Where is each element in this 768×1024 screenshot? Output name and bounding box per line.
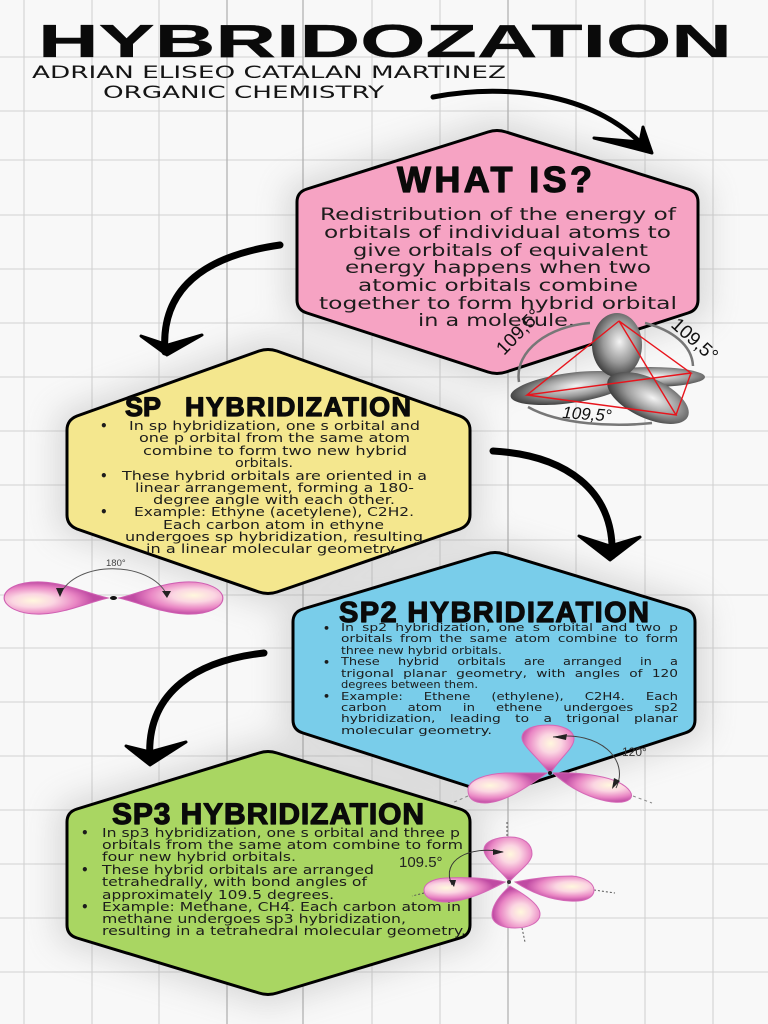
text: sp2 bullets: orbitals from the same atom combine to form: [341, 632, 678, 645]
heading: sp: HYBRIDIZATION: [185, 392, 411, 422]
arrow: to what is: [433, 91, 652, 153]
heading: sp3: SP3 HYBRIDIZATION: [112, 798, 424, 831]
text: sp3 bullets: •: [81, 900, 89, 914]
text: sp bullets: Each carbon atom in ethyne: [163, 518, 384, 532]
subject: ORGANIC CHEMISTRY: [103, 83, 385, 103]
text: sp bullets: linear arrangement, forming a 180-: [135, 481, 414, 495]
icon: trigonal sp2 orbitals: 120°: [622, 745, 647, 759]
text: sp3 bullets: approximately 109.5 degrees.: [102, 888, 334, 902]
text: sp3 bullets: methane undergoes sp3 hybridization,: [102, 912, 406, 926]
arrow: to sp3: [126, 653, 264, 765]
icon: tetrahedral orbital diagram: 109,5°: [562, 403, 612, 425]
icon: tetrahedral orbital diagram: [492, 305, 722, 435]
text: sp2 bullets: These hybrid orbitals are arranged in a: [340, 655, 678, 668]
text: sp3 bullets: orbitals from the same atom combine to form: [102, 838, 463, 852]
text: sp bullets: combine to form two new hybrid: [143, 444, 407, 458]
text: sp bullets: degree angle with each other.: [153, 493, 395, 507]
text: sp2 bullets: carbon atom in ethene undergoes sp2: [341, 701, 678, 714]
text: sp bullets: These hybrid orbitals are oriented in a: [121, 469, 427, 483]
text: sp bullets: in a linear molecular geometry.: [146, 542, 398, 556]
icon: linear sp orbitals: 180°: [106, 558, 126, 569]
text: sp bullets: [100, 419, 427, 556]
text: sp2 bullets: •: [323, 656, 330, 669]
text: sp2 bullets: •: [323, 690, 330, 703]
text: sp2 bullets: three new hybrid orbitals.: [341, 644, 502, 657]
icon: trigonal sp2 orbitals: [452, 725, 652, 803]
text: sp bullets: Example: Ethyne (acetylene), C2H2.: [134, 505, 414, 519]
text: sp3 bullets: resulting in a tetrahedral molecular geometry.: [102, 924, 466, 938]
text: sp2 bullets: hybridization, leading to a trigonal planar: [341, 712, 679, 725]
panel: what is: [297, 130, 698, 374]
text: definition: in a molecule.: [418, 311, 575, 331]
text: definition: energy happens when two: [345, 258, 651, 278]
icon: tetrahedral orbital diagram: 109,5°: [492, 305, 546, 359]
text: definition: orbitals of individual atoms to: [324, 223, 671, 243]
text: sp bullets: •: [100, 469, 108, 483]
panel: sp2 hybridization: [293, 552, 695, 794]
text: sp2 bullets: degrees between them.: [341, 678, 478, 691]
icon: tetrahedral sp3 orbitals: 109.5°: [399, 854, 443, 871]
text: definition: give orbitals of equivalent: [353, 241, 648, 261]
title: HYBRIDOZATION: [38, 15, 732, 67]
text: definition: Redistribution of the energy of: [320, 205, 677, 225]
arrow: to sp2: [493, 451, 640, 560]
text: sp2 bullets: [323, 621, 679, 737]
text: sp3 bullets: •: [81, 826, 89, 840]
text: sp3 bullets: In sp3 hybridization, one s orbital and three p: [102, 826, 460, 840]
arrow: to sp: [141, 245, 280, 355]
text: sp2 bullets: Example: Ethene (ethylene), C2H4. Each: [341, 690, 678, 703]
icon: linear sp orbitals: [4, 558, 223, 614]
panel: sp3 hybridization: [67, 752, 470, 994]
heading: sp2: SP2 HYBRIDIZATION: [339, 597, 649, 629]
text: sp2 bullets: molecular geometry.: [341, 724, 492, 737]
panel: sp hybridization: [67, 350, 470, 594]
icon: tetrahedral orbital diagram: 109,5°: [667, 314, 722, 367]
text: sp2 bullets: In sp2 hybridization, one s orbital and two p: [341, 621, 678, 634]
text: definition: [319, 205, 677, 331]
heading: sp: SP: [125, 392, 161, 422]
text: sp bullets: orbitals.: [235, 456, 293, 470]
author name: ADRIAN ELISEO CATALAN MARTINEZ: [32, 63, 506, 83]
text: sp3 bullets: four new hybrid orbitals.: [102, 850, 296, 864]
text: sp3 bullets: [81, 826, 466, 938]
text: sp3 bullets: tetrahedrally, with bond angles of: [102, 875, 368, 889]
text: sp3 bullets: Example: Methane, CH4. Each carbon atom in: [102, 900, 461, 914]
text: sp bullets: In sp hybridization, one s orbital and: [129, 419, 420, 433]
text: sp bullets: one p orbital from the same atom: [139, 431, 410, 445]
text: sp bullets: •: [100, 505, 108, 519]
text: sp3 bullets: These hybrid orbitals are arranged: [101, 863, 374, 877]
text: sp3 bullets: •: [81, 863, 89, 877]
text: sp bullets: •: [100, 419, 108, 433]
icon: tetrahedral sp3 orbitals: [399, 822, 615, 942]
text: sp2 bullets: trigonal planar geometry, with angles of 120: [341, 667, 678, 680]
text: definition: atomic orbitals combine: [358, 276, 638, 296]
text: sp bullets: undergoes sp hybridization, resulting: [125, 530, 423, 544]
text: definition: together to form hybrid orbital: [319, 294, 677, 314]
heading: what is: WHAT IS?: [397, 159, 592, 200]
text: sp2 bullets: •: [323, 622, 330, 635]
